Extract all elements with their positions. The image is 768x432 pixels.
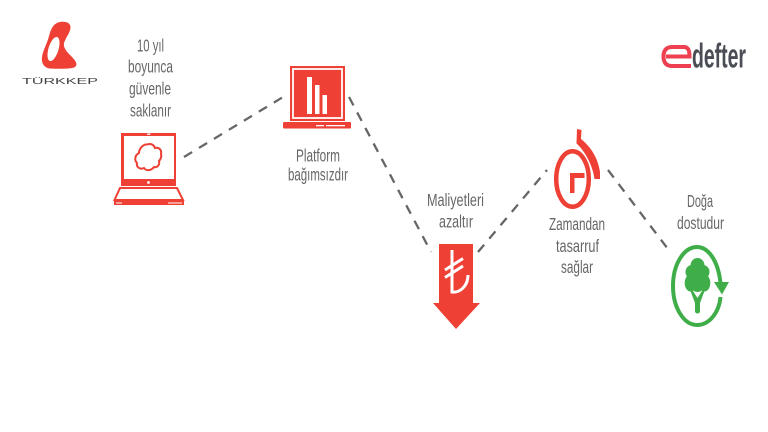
- label: Zamandan tasarruf sağlar: Zamandan: [549, 214, 605, 234]
- label: Platform bağımsızdır: Platform: [296, 146, 340, 166]
- dashed connector lines: [184, 94, 671, 253]
- label: Zamandan tasarruf sağlar: [549, 214, 605, 277]
- logo: TÜRKKEP: [22, 22, 99, 86]
- label: Maliyetleri azaltır: [427, 190, 484, 232]
- label: Maliyetleri azaltır: Maliyetleri: [427, 190, 484, 210]
- label: Platform bağımsızdır: bağımsızdır: [288, 164, 348, 184]
- label: 10 yıl boyunca güvenle saklanır: boyunca: [128, 56, 173, 76]
- label: 10 yıl boyunca güvenle saklanır: güvenle: [129, 78, 171, 98]
- label: Maliyetleri azaltır: azaltır: [439, 212, 473, 232]
- label: Doğa dostudur: dostudur: [677, 213, 724, 233]
- label: Zamandan tasarruf sağlar: sağlar: [561, 257, 593, 277]
- label: Doğa dostudur: [677, 191, 724, 233]
- label: Platform bağımsızdır: [288, 146, 348, 184]
- icon: lira down arrow: [433, 244, 480, 329]
- icon: green tree with cycle arrow: [673, 247, 729, 325]
- label: 10 yıl boyunca güvenle saklanır: saklanır: [130, 100, 171, 120]
- icon: laptop with cloud: [114, 133, 184, 205]
- label: 10 yıl boyunca güvenle saklanır: [128, 36, 173, 120]
- label: Zamandan tasarruf sağlar: tasarruf: [556, 236, 599, 256]
- label: 10 yıl boyunca güvenle saklanır: 10 yıl: [137, 36, 164, 56]
- label: Doğa dostudur: Doğa: [687, 191, 713, 211]
- icon: clock: [556, 129, 600, 207]
- logo: edefter: [664, 38, 746, 76]
- logo: TÜRKKEP: TÜRKKEP: [22, 76, 99, 86]
- icon: laptop with bar chart: [283, 66, 351, 128]
